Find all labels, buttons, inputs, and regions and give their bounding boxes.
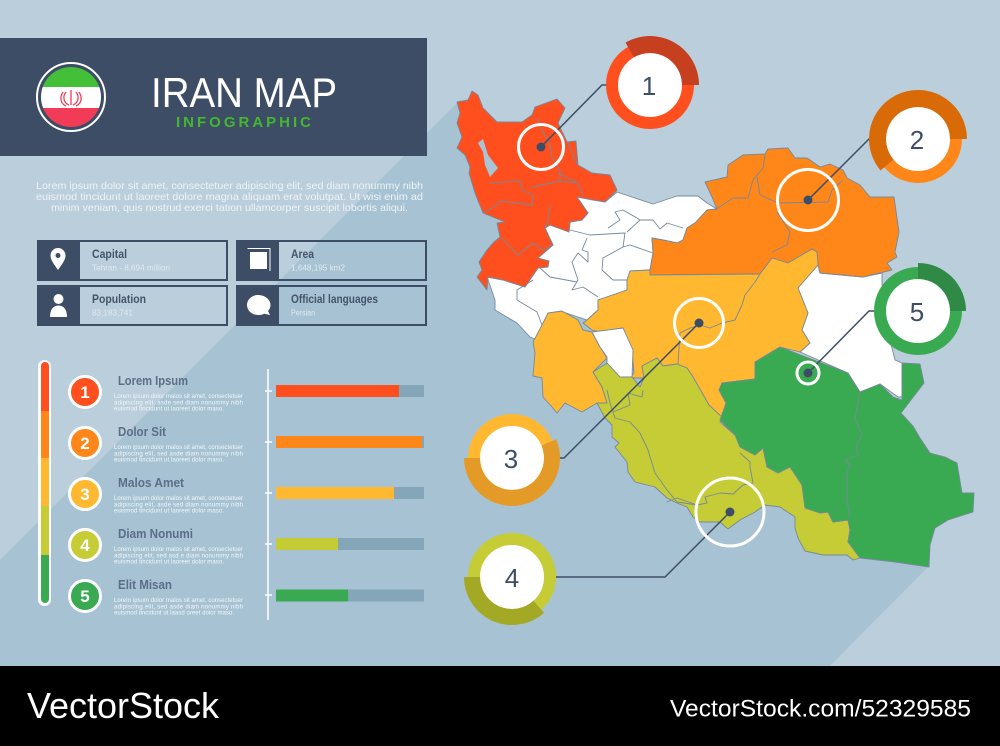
panel: capital: Tehran - 8,694 million <box>92 264 170 272</box>
panel: population <box>37 285 227 326</box>
callout 4 <box>464 478 764 625</box>
panel: official languages: Persian <box>291 308 315 318</box>
icon: Iran flag <box>37 63 105 131</box>
callout 5: 5 <box>910 297 924 327</box>
legend row 2: Dolor Sit <box>118 424 167 439</box>
intro text block: Lorem ipsum dolor sit amet, consectetuer adipiscing elit, sed diam nonummy nibh <box>36 180 423 192</box>
callout 3 <box>464 298 724 506</box>
legend row 2 <box>70 424 243 464</box>
header panel <box>0 38 427 156</box>
legend row 4 <box>70 526 243 566</box>
legend row 2: euismod tincidunt ut laoreet dolor maso. <box>114 458 224 464</box>
legend row 2: 2 <box>80 434 90 453</box>
long map shadow <box>0 100 930 666</box>
icon: area square <box>248 248 270 271</box>
panel: area: Area <box>291 247 314 261</box>
callout 2 <box>778 90 967 231</box>
callout 4: 4 <box>505 563 519 593</box>
legend row 3: 3 <box>80 485 90 504</box>
subtitle: INFOGRAPHIC <box>176 114 311 131</box>
panel: population: 83,183,741 <box>92 308 134 318</box>
footer bar <box>0 666 1000 746</box>
legend row 3 <box>70 475 243 514</box>
watermark logo: VectorStock <box>27 685 220 726</box>
intro text block <box>36 180 423 214</box>
region 3: yellow central <box>533 249 818 420</box>
panel: population: Population <box>92 292 146 306</box>
icon: location pin <box>50 248 66 270</box>
legend row 5 <box>70 577 243 616</box>
bar chart <box>265 369 424 620</box>
legend row 1: euismod tincidunt ut laoreet dolor maso. <box>114 406 224 412</box>
legend row 5: adipiscing elit, sed asde diam nonummy nibh <box>114 604 243 610</box>
intro text block: minim veniam, quis nostrud exerci tation ullamcorper suscipit lobortis aliqui. <box>51 202 408 214</box>
legend row 4: Lorem ipsum dolor malos sit amet, consectetuer <box>114 547 243 553</box>
watermark url: VectorStock.com/52329585 <box>670 696 971 722</box>
legend row 1: Lorem Ipsum <box>118 373 188 388</box>
lake <box>478 139 498 177</box>
intro text block: euismod tincidunt ut laoreet dolore magna aliquam erat volutpat. Ut wisi enim ad <box>36 191 423 203</box>
callout 3: 3 <box>504 444 518 474</box>
legend row 3: Lorem ipsum dolor malos sit amet, consectetuer <box>114 496 243 502</box>
legend row 1: Lorem ipsum dolor malos sit amet, consectetuer <box>114 394 243 400</box>
legend row 1: 1 <box>80 383 90 402</box>
panel: capital <box>37 240 227 281</box>
region 1: red north-west <box>457 91 617 290</box>
callout 5 <box>797 263 966 384</box>
callout 1 <box>518 36 699 169</box>
legend row 2: adipiscing elit, sed asde diam nonummy nibh <box>114 452 243 458</box>
panel: area <box>236 240 426 281</box>
callout 2: 2 <box>910 125 924 155</box>
region 5: green south-east <box>719 347 974 567</box>
legend row 5: 5 <box>80 587 90 606</box>
legend row 3: Malos Amet <box>118 475 185 490</box>
panel: capital: Capital <box>92 247 127 261</box>
legend row 2: Lorem ipsum dolor malos sit amet, consectetuer <box>114 445 243 451</box>
legend row 1 <box>70 373 243 412</box>
region: white eastern province <box>798 265 902 397</box>
region 2: orange north-east <box>650 148 899 277</box>
legend row 5: Lorem ipsum dolor malos sit amet, consectetuer <box>114 598 243 604</box>
legend row 5: euismod tincidunt ut laasd oreet dolor maso. <box>114 610 234 616</box>
legend row 5: Elit Misan <box>118 577 172 592</box>
legend row 4: 4 <box>80 536 90 555</box>
region 4: olive south <box>593 358 860 560</box>
icon: person <box>50 294 67 317</box>
title: IRAN MAP <box>151 69 337 116</box>
panel: official languages <box>236 285 426 326</box>
icon: speech bubble <box>247 295 270 315</box>
legend row 4: adipiscing elit, sed asd e diam nonummy nibh <box>114 554 243 560</box>
legend row 4: euismod tincidunt ut laoreet dolor maso. <box>114 560 224 566</box>
vertical colour scale <box>38 360 51 606</box>
callout 1: 1 <box>642 71 656 101</box>
region: white north-central provinces <box>487 192 717 340</box>
legend row 3: adipiscing elit, asde sed diam nonummy nibh <box>114 502 243 508</box>
legend row 1: adipiscing elit, asde sed diam nonummy nibh <box>114 400 243 406</box>
white enclave <box>592 328 633 377</box>
panel: official languages: Official languages <box>291 292 378 306</box>
map of Iran <box>457 91 974 567</box>
legend row 4: Diam Nonumi <box>118 526 193 541</box>
panel: area: 1,648,195 km2 <box>291 264 346 272</box>
legend row 3: euismod tincidunt ut laoreet dolor maso. <box>114 508 224 514</box>
